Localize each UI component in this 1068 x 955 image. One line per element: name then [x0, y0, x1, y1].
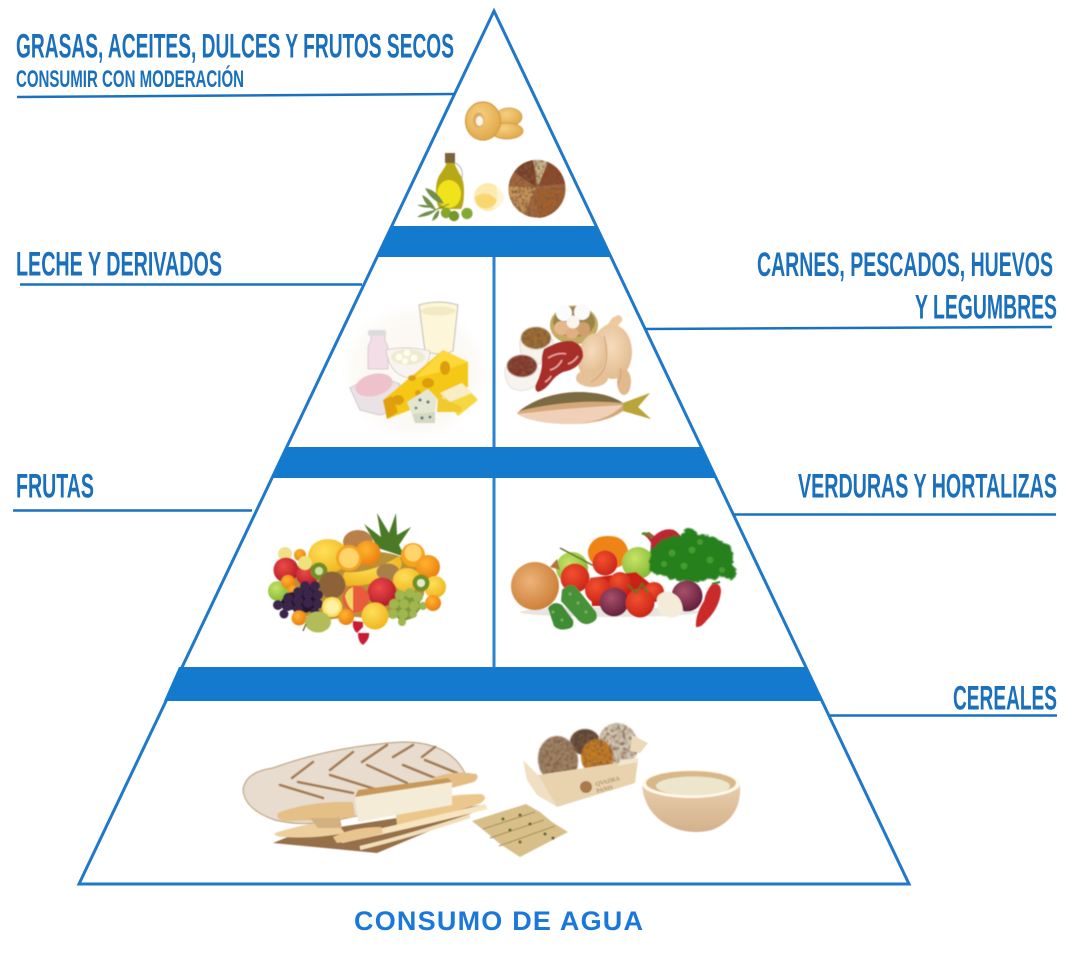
icon: dairy products [349, 302, 481, 434]
leader line: fruit [13, 509, 252, 512]
icon: vegetable pile [511, 529, 736, 630]
icon: butter curl [474, 183, 504, 211]
icon: rice bowl [642, 770, 740, 832]
egg bowl [550, 306, 598, 344]
icon: olive oil bottle and olives [417, 153, 473, 221]
yogurt pot [350, 379, 400, 415]
leader line: proteins [645, 327, 1052, 329]
small cheese pieces [440, 383, 478, 416]
leader line: fats [17, 94, 455, 97]
steak [535, 341, 583, 392]
icon: bread loaf and baguettes [243, 742, 488, 853]
leader line: cereals [830, 714, 1057, 717]
swiss cheese wedge [383, 350, 468, 419]
tomatoes [590, 572, 658, 606]
label: fruit: FRUTAS [16, 468, 94, 506]
leader line: vegetables [733, 513, 1056, 516]
icon: fruit pile [268, 513, 446, 645]
almonds bowl [520, 333, 554, 365]
tier band 1 [376, 226, 612, 257]
leader line: dairy [20, 283, 362, 286]
icon: crackers [472, 804, 568, 857]
green grapes [394, 595, 421, 622]
parsley [649, 529, 736, 582]
icon: meat, eggs, legumes and fish [505, 304, 651, 424]
dark grapes [280, 586, 321, 613]
chicken [592, 315, 624, 342]
fish [517, 392, 651, 424]
divider dairy / protein [492, 257, 496, 447]
tier band 3 [164, 667, 823, 701]
label: water consumption: CONSUMO DE AGUA [354, 906, 643, 936]
icon: bread in branded box: QVADRA [595, 776, 621, 788]
beans bowl [505, 362, 540, 391]
milk bottle [368, 333, 388, 369]
icon: doughnuts [466, 102, 523, 140]
label: dairy: LECHE Y DERIVADOS [16, 246, 222, 284]
icon: mixed nuts [508, 160, 566, 218]
divider fruit / vegetables [492, 478, 496, 668]
pile backing [287, 552, 424, 620]
blue cheese [407, 389, 437, 414]
icon: bread in branded box [523, 719, 648, 807]
milk glass [419, 302, 458, 354]
pyramid outline [79, 11, 909, 884]
label: fats heading: GRASAS, ACEITES, DULCES Y FRUTOS SECOS [16, 28, 454, 66]
label: moderation note: CONSUMIR CON MODERACIÓN [16, 65, 244, 93]
tier band 2 [271, 447, 717, 478]
icon: bread in branded box: PANIS [596, 785, 614, 795]
cottage cheese bowl [386, 348, 430, 378]
